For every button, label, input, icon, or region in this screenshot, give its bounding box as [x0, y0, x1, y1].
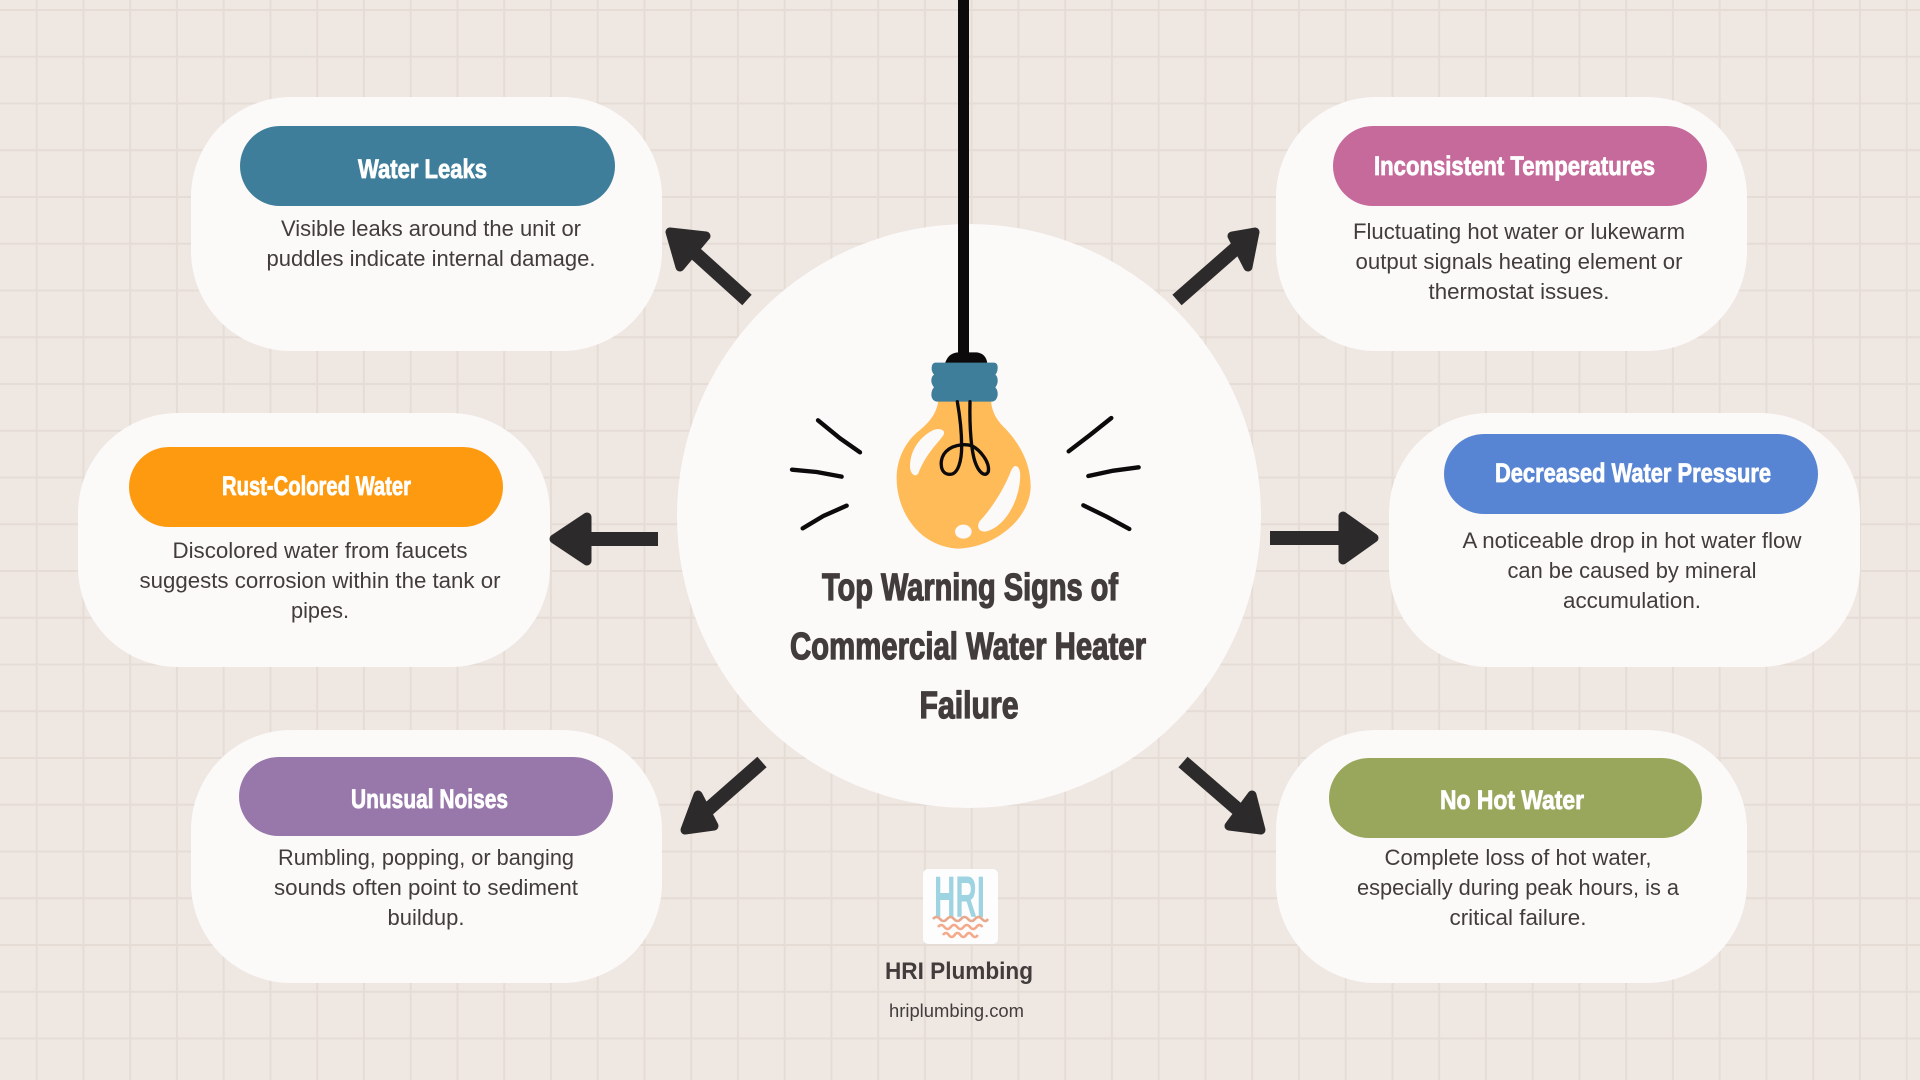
icon: hanging light bulb [792, 0, 1139, 549]
panel: Water Leaks [191, 97, 662, 351]
panel: No Hot Water: critical failure. [1450, 905, 1586, 930]
arrow: to Water Leaks [670, 232, 747, 300]
panel: Decreased Water Pressure: can be caused by mineral [1508, 558, 1756, 583]
title: Commercial Water Heater [790, 626, 1146, 668]
panel: Decreased Water Pressure: A noticeable drop in hot water flow [1462, 528, 1802, 553]
panel: Inconsistent Temperatures: thermostat issues. [1428, 279, 1610, 304]
panel: No Hot Water: especially during peak hours, is a [1357, 875, 1680, 900]
rays [792, 418, 1139, 529]
arrow: to Rust-Colored Water [554, 517, 658, 561]
panel: Decreased Water Pressure: Decreased Water Pressure [1495, 458, 1771, 488]
panel: Water Leaks: Water Leaks [358, 154, 487, 184]
logo: HRI Plumbing: HRI [934, 865, 985, 930]
panel: Unusual Noises: Unusual Noises [351, 784, 508, 814]
panel: Unusual Noises [191, 730, 662, 983]
arrow: to No Hot Water [1183, 762, 1261, 830]
panel: Rust-Colored Water: Rust-Colored Water [222, 471, 411, 501]
panel: Inconsistent Temperatures: output signals heating element or [1356, 249, 1682, 274]
filament [941, 402, 989, 474]
title: Top Warning Signs of [822, 567, 1118, 609]
panel: Rust-Colored Water [78, 413, 550, 667]
title [790, 567, 1146, 727]
panel: Unusual Noises: Rumbling, popping, or banging [278, 845, 574, 870]
bulb glass [897, 401, 1031, 549]
panel: No Hot Water: Complete loss of hot water, [1384, 845, 1652, 870]
panel: Unusual Noises: buildup. [388, 905, 464, 930]
arrow: to Unusual Noises [685, 762, 762, 830]
panel: Decreased Water Pressure [1389, 413, 1860, 667]
panel: Unusual Noises: sounds often point to sediment [274, 875, 578, 900]
panel: Rust-Colored Water: suggests corrosion within the tank or [140, 568, 500, 593]
panel: Water Leaks: puddles indicate internal damage. [266, 246, 596, 271]
website: hriplumbing.com [889, 1001, 1024, 1021]
panel: Rust-Colored Water: Discolored water from faucets [172, 538, 468, 563]
arrow: to Decreased Water Pressure [1270, 516, 1374, 560]
logo: HRI Plumbing [923, 865, 998, 944]
cord [958, 0, 969, 360]
panel: No Hot Water: No Hot Water [1440, 785, 1584, 815]
panel: Inconsistent Temperatures: Fluctuating hot water or lukewarm [1353, 219, 1685, 244]
title: Failure [920, 685, 1018, 727]
brand name: HRI Plumbing [885, 958, 1033, 985]
socket [931, 363, 998, 402]
panel: Inconsistent Temperatures [1276, 97, 1747, 351]
panel: Decreased Water Pressure: accumulation. [1563, 588, 1701, 613]
arrow: to Inconsistent Temperatures [1177, 232, 1255, 300]
central circle panel [677, 224, 1261, 808]
highlights [910, 429, 944, 475]
panel: Water Leaks: Visible leaks around the unit or [281, 216, 581, 241]
panel: No Hot Water [1276, 730, 1747, 983]
cap [945, 352, 987, 363]
panel: Rust-Colored Water: pipes. [291, 598, 349, 623]
panel: Inconsistent Temperatures: Inconsistent Temperatures [1374, 151, 1655, 181]
